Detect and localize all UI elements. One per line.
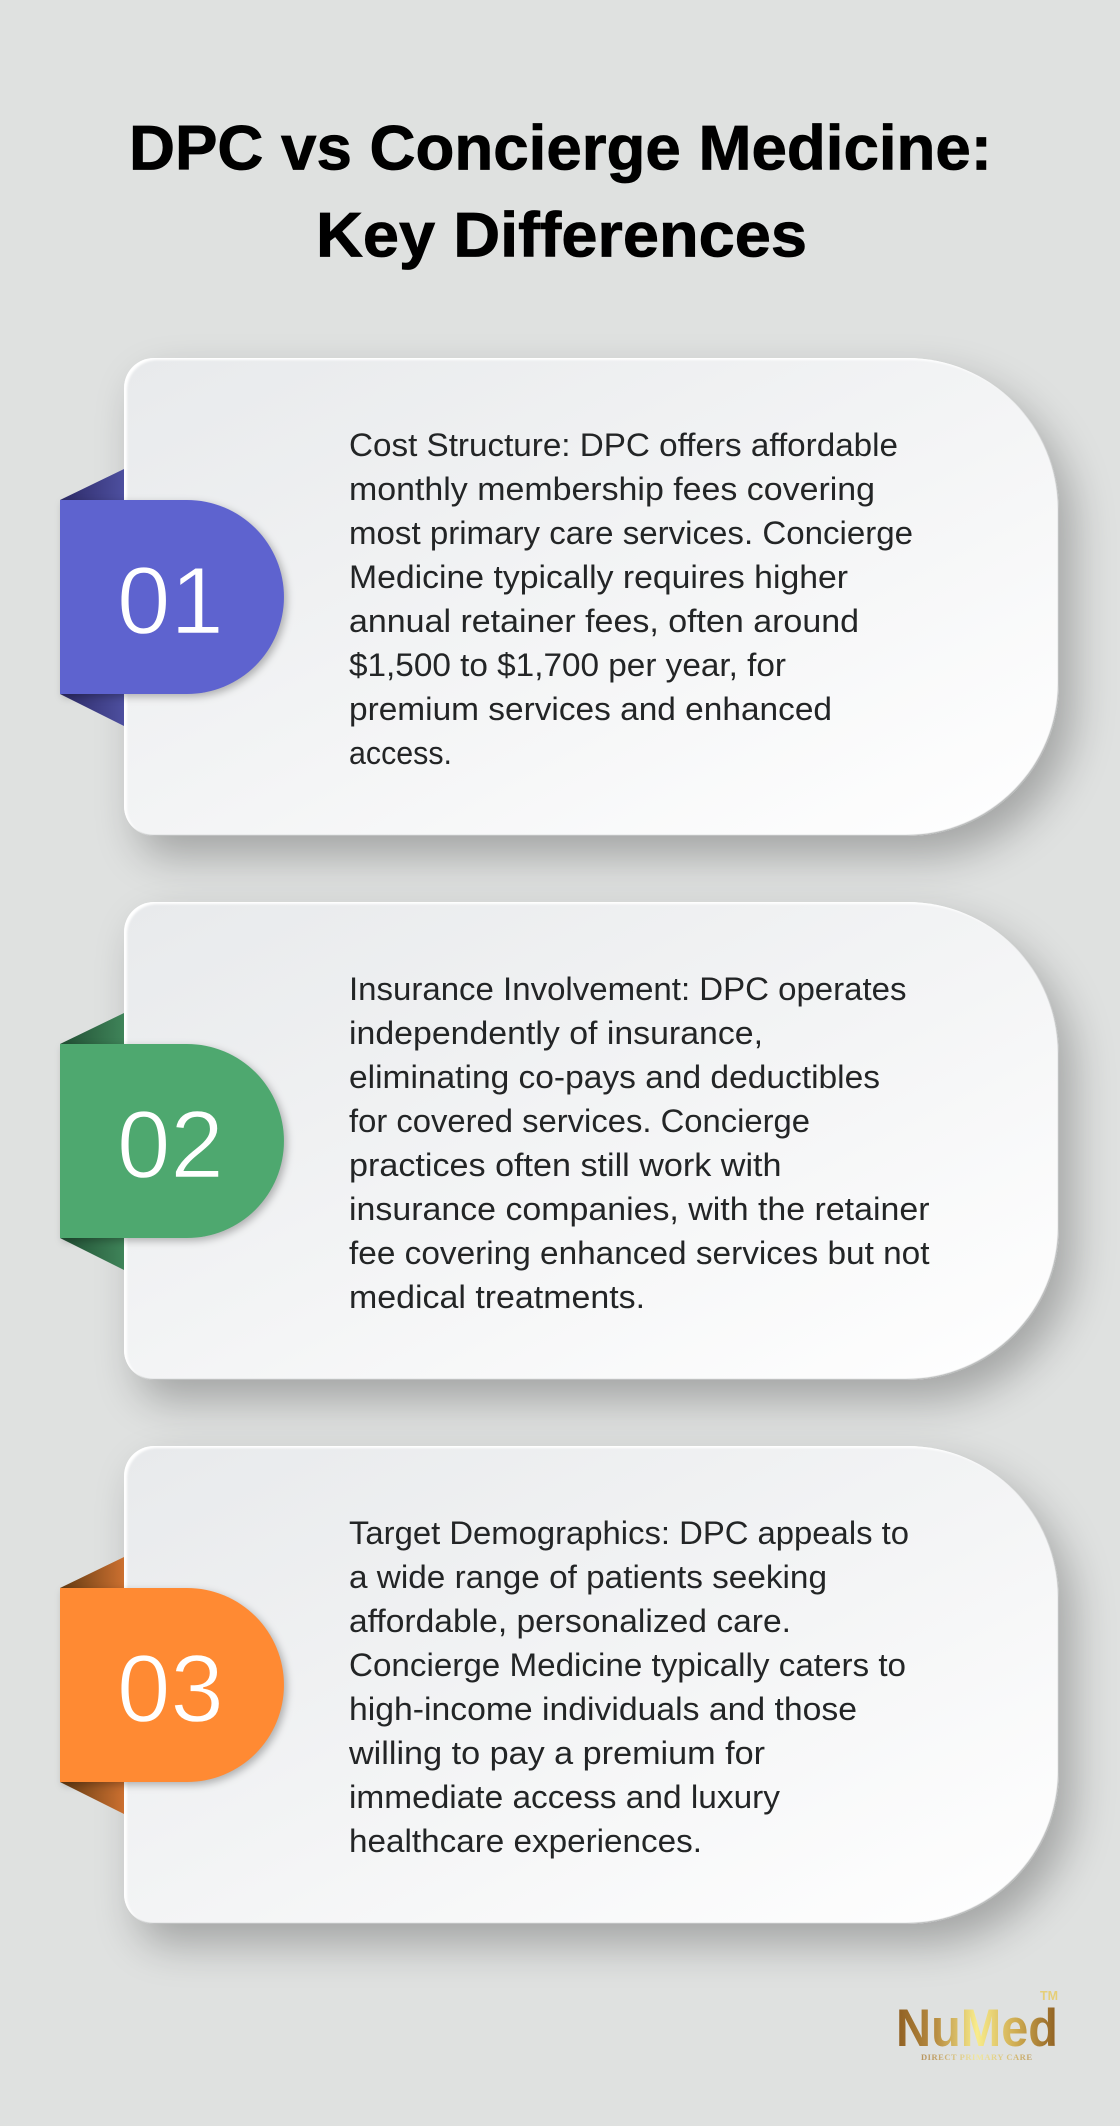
logo: NuMed: NuMed [896,1999,1058,2058]
text block: target demographics: Concierge Medicine typically caters to [349,1647,906,1683]
number ribbon 03 [59,1557,292,1814]
number ribbon 02: 02 [117,1092,224,1198]
text block: insurance involvement: fee covering enhanced services but not [349,1235,930,1271]
card background [124,358,1059,836]
text block: insurance involvement [349,971,930,1315]
text block: target demographics: Target Demographics: DPC appeals to [349,1515,909,1551]
number ribbon 01 [59,469,292,726]
logo: NuMed: TM [1040,1988,1058,2003]
text block: target demographics: healthcare experiences. [349,1823,702,1859]
text block: cost structure: Cost Structure: DPC offers affordable [349,427,898,463]
text block: insurance involvement: practices often still work with [349,1147,782,1183]
text block: insurance involvement: for covered services. Concierge [349,1103,810,1139]
panel: insurance involvement [59,900,1094,1422]
panel: target demographics [59,1444,1094,1966]
logo: NuMed: DIRECT PRIMARY CARE [921,2052,1032,2062]
text block: insurance involvement: independently of insurance, [349,1015,763,1051]
number ribbon 02 [59,1013,292,1270]
text block: cost structure [349,427,913,771]
text block: insurance involvement: Insurance Involvement: DPC operates [349,971,906,1007]
text block: cost structure: monthly membership fees covering [349,471,875,507]
text block: cost structure: most primary care services. Concierge [349,515,913,551]
number ribbon 03: 03 [117,1636,224,1742]
card background [124,1446,1059,1924]
text block: insurance involvement: insurance companies, with the retainer [349,1191,930,1227]
panel: cost structure [59,356,1094,878]
text block: target demographics: affordable, personalized care. [349,1603,791,1639]
text block: target demographics: a wide range of patients seeking [349,1559,827,1595]
text block: target demographics: high-income individuals and those [349,1691,857,1727]
text block: cost structure: access. [349,735,452,771]
text block: insurance involvement: eliminating co-pays and deductibles [349,1059,880,1095]
text block: cost structure: annual retainer fees, often around [349,603,859,639]
text block: cost structure: $1,500 to $1,700 per year, for [349,647,786,683]
title: DPC vs Concierge Medicine: [129,114,992,184]
text block: target demographics [348,1515,909,1859]
text block: insurance involvement: medical treatments. [349,1279,645,1315]
text block: target demographics: immediate access and luxury [349,1779,780,1815]
number ribbon 01: 01 [117,548,224,654]
text block: target demographics: willing to pay a premium for [348,1735,765,1771]
title [129,114,992,270]
title: Key Differences [316,200,807,270]
text block: cost structure: Medicine typically requires higher [349,559,848,595]
card background [124,902,1059,1380]
text block: cost structure: premium services and enhanced [349,691,832,727]
